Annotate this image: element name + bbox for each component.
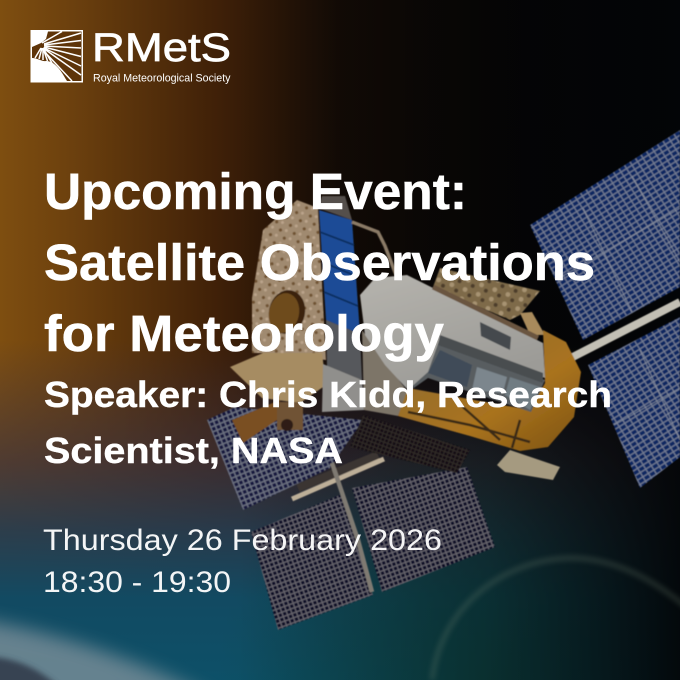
title: Satellite Observations [44, 234, 595, 291]
dark band on body [438, 335, 543, 383]
solar panel: lower right-centre [352, 467, 495, 592]
title [44, 163, 595, 362]
date and time: Thursday 26 February 2026 [43, 524, 442, 557]
gold end cap and lower foil mass [398, 330, 581, 451]
date and time: 18:30 - 19:30 [43, 566, 231, 599]
foil: lower flap [230, 353, 326, 403]
silver main body [360, 275, 545, 390]
gold foil top [433, 268, 540, 320]
top grey cap [318, 196, 352, 220]
speaker: Scientist, NASA [44, 430, 343, 471]
speaker: Speaker: Chris Kidd, Research [44, 374, 612, 415]
solar panel: upper right [530, 130, 680, 340]
frame strut [352, 222, 396, 275]
panel mast: central spar [332, 463, 372, 592]
satellite illustration [207, 130, 680, 630]
solar panel: upper left [207, 407, 363, 510]
solar panel: lower left [251, 494, 373, 630]
icon: sun rays and hill [30, 30, 83, 82]
blue-grey windows [428, 350, 540, 410]
society name: Royal Meteorological Society [93, 72, 231, 84]
panel mast: right [563, 302, 680, 362]
panel mast: dark backing strip [298, 455, 378, 488]
dark vent on body [480, 322, 511, 350]
title: Upcoming Event: [44, 163, 467, 220]
grey-tan mid section behind blue strip [362, 330, 408, 416]
dark seams in lower foil [408, 400, 530, 448]
blue instrument strip [319, 210, 360, 334]
top brown strip [433, 287, 538, 338]
date and time [43, 524, 442, 599]
shaded body backing [408, 338, 545, 412]
foil: dark circular aperture [265, 287, 309, 337]
title: for Meteorology [44, 305, 445, 362]
instrument box: speckled foil [252, 200, 326, 360]
logo: RMetS [30, 26, 231, 84]
grey instrument block [326, 320, 362, 380]
solar panel: lower right [588, 317, 680, 488]
wordmark: RMetS [92, 26, 231, 70]
bracket block and lens [277, 402, 303, 431]
speaker [44, 374, 612, 471]
white lower block [322, 364, 364, 412]
panel mast: pale cross boom [292, 459, 384, 499]
foil wedge over left panel [232, 400, 280, 443]
small cylinder [497, 450, 560, 480]
dark radiator panel [350, 415, 470, 473]
foil right tan blob [520, 312, 545, 335]
